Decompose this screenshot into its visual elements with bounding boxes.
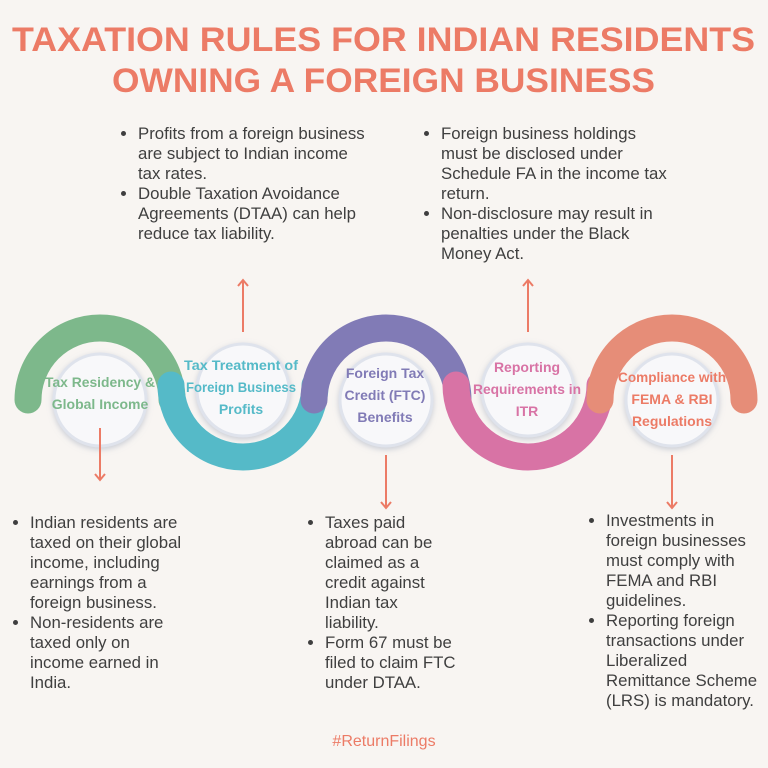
text: FTC: Taxes paid (325, 513, 405, 532)
text: FEMA: Remittance Scheme (606, 671, 757, 690)
text: FEMA: Reporting foreign (606, 611, 735, 630)
text: reporting: return. (441, 184, 490, 203)
footer hashtag: #ReturnFilings (332, 733, 436, 750)
text: FEMA: (LRS) is mandatory. (606, 691, 754, 710)
text: FTC: Form 67 must be (325, 633, 452, 652)
text: FTC: credit against (325, 573, 425, 592)
step labels: Credit (FTC) (345, 387, 425, 403)
title: OWNING A FOREIGN BUSINESS (112, 62, 655, 100)
step labels: Regulations (632, 413, 712, 429)
text: FTC: Indian tax (325, 593, 398, 612)
step labels: Compliance with (618, 369, 726, 385)
text: reporting: Foreign business holdings (441, 124, 636, 143)
step labels: FEMA & RBI (631, 391, 713, 407)
text: residency: Non-residents are (30, 613, 163, 632)
step labels: Foreign Tax (346, 365, 424, 381)
text: FEMA: foreign businesses (606, 531, 746, 550)
step labels: Tax Treatment of (184, 357, 298, 373)
step labels: Foreign Business (186, 379, 296, 395)
text: residency: income earned in (30, 653, 159, 672)
text: tax treatment: Agreements (DTAA) can help (138, 204, 356, 223)
step labels: Profits (219, 401, 263, 417)
text: residency: foreign business. (30, 593, 157, 612)
text: FTC: under DTAA. (325, 673, 421, 692)
text: residency: income, including (30, 553, 160, 572)
step labels (45, 357, 726, 429)
text: reporting: Schedule FA in the income tax (441, 164, 667, 183)
text: reporting: Money Act. (441, 244, 524, 263)
text: residency: India. (30, 673, 71, 692)
text: FEMA: must comply with (606, 551, 735, 570)
text: FEMA: Liberalized (606, 651, 687, 670)
step labels: Reporting (494, 359, 560, 375)
text: reporting (424, 124, 667, 263)
text: FTC (308, 513, 456, 692)
text: residency: earnings from a (30, 573, 147, 592)
step labels: ITR (516, 403, 538, 419)
text: tax treatment: Profits from a foreign business (138, 124, 365, 143)
text: residency (13, 513, 181, 692)
text: FTC: claimed as a (325, 553, 419, 572)
text: residency: Indian residents are (30, 513, 177, 532)
text: FEMA: guidelines. (606, 591, 686, 610)
text: reporting: Non-disclosure may result in (441, 204, 653, 223)
text: tax treatment: tax rates. (138, 164, 207, 183)
text: tax treatment: are subject to Indian income (138, 144, 348, 163)
inner circles (54, 344, 718, 446)
text: FTC: liability. (325, 613, 379, 632)
text: residency: taxed on their global (30, 533, 181, 552)
text: reporting: penalties under the Black (441, 224, 629, 243)
text: tax treatment: Double Taxation Avoidance (138, 184, 340, 203)
title: TAXATION RULES FOR INDIAN RESIDENTS (12, 21, 755, 59)
text: FEMA: FEMA and RBI (606, 571, 717, 590)
step labels: Requirements in (473, 381, 581, 397)
text: reporting: must be disclosed under (441, 144, 623, 163)
text: FEMA: Investments in (606, 511, 714, 530)
text: FTC: abroad can be (325, 533, 432, 552)
wave diagram (14, 314, 758, 470)
arcs (28, 328, 744, 457)
text: tax treatment: reduce tax liability. (138, 224, 275, 243)
text: tax treatment (121, 124, 365, 243)
step labels: Benefits (357, 409, 413, 425)
text: FTC: filed to claim FTC (325, 653, 456, 672)
step labels: Tax Residency & (45, 374, 155, 390)
step labels: Global Income (52, 396, 148, 412)
text: FEMA: transactions under (606, 631, 744, 650)
text: residency: taxed only on (30, 633, 130, 652)
title (12, 21, 755, 100)
text: FEMA (589, 511, 757, 710)
